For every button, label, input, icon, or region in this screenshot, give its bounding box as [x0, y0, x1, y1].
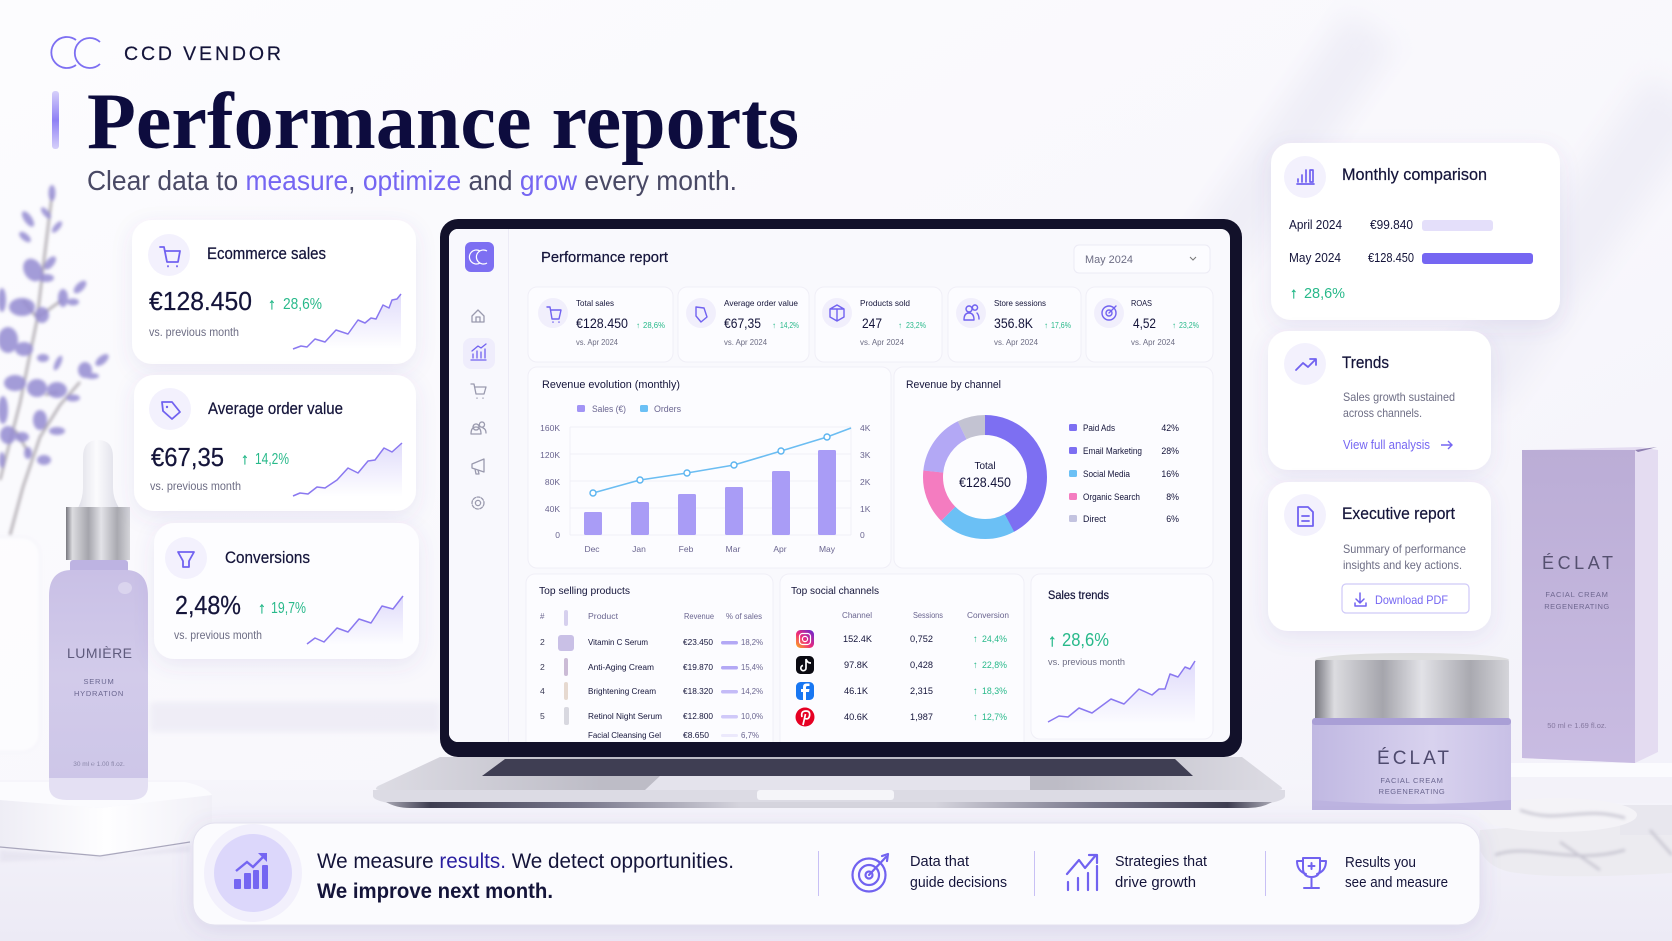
panel: top selling products: Top selling products: [539, 585, 630, 597]
panel: average order value: [134, 375, 416, 511]
box label: [1542, 553, 1613, 730]
table rows: [540, 635, 763, 740]
lavender sprig: [0, 185, 111, 535]
bars: [584, 450, 836, 535]
kpi: roas: 23,2%: [1179, 321, 1199, 330]
sparkline: [1048, 661, 1195, 724]
axes: 2K: [860, 477, 871, 487]
axes: Apr: [773, 544, 787, 554]
panel: revenue by channel: Total: [974, 461, 996, 472]
axes: May: [819, 544, 836, 554]
panel: trends: [1268, 331, 1491, 470]
table rows: 6,7%: [741, 730, 759, 740]
table rows: €19.870: [683, 662, 713, 672]
sparkline: [293, 294, 401, 349]
serum label: SERUM: [83, 677, 115, 686]
legend: Sales (€): [592, 404, 626, 414]
table rows: €18.320: [683, 686, 713, 696]
panel: conversions: [154, 523, 419, 659]
panel: monthly comparison: €128.450: [1368, 251, 1414, 265]
panel: ecommerce sales: 28,6%: [283, 296, 322, 313]
donut legend: Organic Search: [1083, 492, 1140, 502]
table rows: 2: [540, 637, 545, 647]
icon: gear: [472, 497, 484, 509]
panel: revenue evolution chart: Revenue evolution (monthly): [542, 379, 680, 391]
panel: average order value: €67,35: [151, 442, 224, 472]
table rows: 1,987: [910, 712, 933, 723]
kpi: store sessions: 17,6%: [1051, 321, 1071, 330]
panel: conversions: Conversions: [225, 549, 310, 567]
panel: top social channels: Top social channels: [791, 585, 879, 597]
table rows: 18,3%: [982, 686, 1008, 697]
axes: 3K: [860, 450, 871, 460]
panel: executive report: insights and key actions.: [1343, 558, 1462, 572]
axes: 40K: [545, 504, 560, 514]
icon: megaphone: [472, 459, 484, 474]
panel: revenue by channel: €128.450: [959, 474, 1011, 490]
table rows: €8.650: [683, 730, 709, 740]
kpi: average order value: €67,35: [724, 315, 761, 331]
table rows: 4: [540, 686, 545, 696]
kpi: total sales: [528, 287, 673, 362]
icon: cart: [471, 384, 486, 398]
table rows: Facial Cleansing Gel: [588, 730, 661, 740]
panel: trends: across channels.: [1343, 406, 1422, 420]
axes: 0: [860, 530, 865, 540]
text: data that guide decisions: [910, 854, 1007, 891]
table rows: 0,752: [910, 634, 933, 645]
panel: conversions: 2,48%: [175, 590, 241, 620]
sidebar: [449, 229, 509, 742]
panel: top selling products: [526, 574, 774, 742]
icon: growth badge: [204, 824, 302, 922]
text: data that guide decisions: guide decisions: [910, 875, 1007, 891]
kpi: roas: vs. Apr 2024: [1131, 338, 1176, 347]
serum bottle: [49, 440, 148, 800]
panel: monthly comparison: Monthly comparison: [1342, 166, 1487, 184]
icon: document: [1298, 507, 1313, 526]
panel: revenue by channel: Revenue by channel: [906, 379, 1001, 391]
panel: revenue evolution chart: [528, 367, 891, 568]
table rows: 46.1K: [844, 686, 869, 697]
panel: ecommerce sales: vs. previous month: [149, 325, 239, 339]
table header: Conversion: [967, 611, 1009, 620]
panel: bottom banner: [193, 823, 1480, 925]
kpi: average order value: vs. Apr 2024: [724, 338, 768, 347]
axes: 1K: [860, 504, 871, 514]
icon: trophy: [1297, 858, 1326, 888]
table header: Product: [588, 612, 619, 621]
legend: Orders: [654, 404, 681, 414]
box label: FACIAL CREAM: [1545, 590, 1609, 599]
sparkline: [307, 596, 403, 645]
legend: [577, 405, 681, 414]
jar label: ÉCLAT: [1377, 748, 1449, 769]
panel: average order value: ↑: [241, 451, 249, 468]
text: data that guide decisions: Data that: [910, 854, 969, 870]
table rows: €23.450: [683, 637, 713, 647]
box label: 50 ml ℮ 1.69 fl.oz.: [1547, 721, 1607, 730]
table rows: 10,0%: [741, 711, 763, 721]
box label: REGENERATING: [1544, 602, 1610, 611]
kpi: roas: [1086, 287, 1213, 362]
donut legend: 6%: [1166, 514, 1179, 524]
table header: #: [540, 612, 545, 621]
kpi: total sales: vs. Apr 2024: [576, 338, 619, 347]
donut legend: Direct: [1083, 514, 1107, 524]
table rows: 24,4%: [982, 634, 1008, 645]
panel: sales trends: ↑: [1048, 631, 1056, 650]
kpi: total sales: Total sales: [576, 298, 614, 308]
icon: facebook: [796, 682, 814, 700]
kpi: store sessions: 356.8K: [994, 315, 1034, 331]
table rows: 2: [540, 662, 545, 672]
donut legend: Social Media: [1083, 469, 1130, 479]
panel: ecommerce sales: Ecommerce sales: [207, 245, 326, 263]
table header: [842, 612, 1008, 618]
serum label: [67, 645, 132, 768]
kpi: store sessions: ↑: [1044, 321, 1048, 330]
kpi: products sold: Products sold: [860, 298, 910, 308]
kpi: average order value: [678, 287, 809, 362]
donut legend: Email Marketing: [1083, 446, 1142, 456]
donut legend: 16%: [1161, 469, 1179, 479]
panel: conversions: ↑: [258, 600, 266, 617]
text: strategies that drive growth: Strategies that: [1115, 854, 1207, 870]
table rows: 22,8%: [982, 660, 1008, 671]
white pedestal under serum: [0, 782, 212, 862]
product box: [1522, 447, 1658, 763]
panel: monthly comparison: April 2024: [1289, 218, 1342, 232]
axes: 80K: [545, 477, 560, 487]
glass vase: [0, 537, 40, 752]
laptop bezel: [440, 219, 1242, 757]
logo: [51, 37, 281, 68]
laptop: [373, 219, 1285, 808]
table rows: Vitamin C Serum: [588, 637, 648, 647]
donut legend: [1069, 423, 1179, 524]
kpi: average order value: ↑: [772, 321, 776, 330]
kpi: products sold: 247: [862, 315, 882, 331]
panel: sales trends: 28,6%: [1062, 630, 1109, 650]
table rows: ↑: [973, 660, 978, 671]
table rows: 18,2%: [741, 637, 763, 647]
button: download pdf: [1342, 584, 1469, 613]
table rows: Anti-Aging Cream: [588, 662, 654, 672]
table header: [540, 610, 762, 626]
panel: trends: Sales growth sustained: [1343, 390, 1455, 404]
table rows: 5: [540, 711, 545, 721]
kpi: average order value: Average order value: [724, 298, 798, 308]
axes: Mar: [726, 544, 740, 554]
panel: average order value: vs. previous month: [150, 479, 241, 493]
icon: strategies chart: [1067, 855, 1097, 890]
kpi: products sold: ↑: [898, 321, 902, 330]
text: strategies that drive growth: [1115, 854, 1207, 891]
kpi: products sold: 23,2%: [906, 321, 926, 330]
axes: 120K: [540, 450, 560, 460]
donut legend: Paid Ads: [1083, 423, 1116, 433]
text: results you see and measure: see and measure: [1345, 875, 1448, 891]
kpi: total sales: ↑: [636, 321, 640, 330]
icon: users: [471, 422, 486, 434]
banner message: We measure results. We detect opportunities.: [317, 850, 734, 873]
donut chart: [923, 415, 1047, 539]
kpi: total sales: €128.450: [576, 315, 628, 331]
subtitle: Clear data to measure, optimize and grow every month.: [87, 165, 737, 196]
kpi: roas: ↑: [1172, 321, 1176, 330]
banner message: We improve next month.: [317, 880, 553, 903]
icon: funnel: [178, 552, 194, 567]
month selector: [1074, 245, 1210, 273]
table rows: ↑: [973, 686, 978, 697]
panel: revenue by channel: [894, 367, 1213, 568]
panel: average order value: 14,2%: [255, 451, 289, 468]
screen: [449, 229, 1230, 764]
donut legend: 28%: [1161, 446, 1179, 456]
panel: sales trends: Sales trends: [1048, 588, 1109, 602]
axes: 0: [555, 530, 560, 540]
kpi: total sales: 28,6%: [643, 321, 665, 330]
panel: conversions: vs. previous month: [174, 628, 262, 642]
sparkline: [293, 443, 402, 497]
kpi: products sold: vs. Apr 2024: [860, 338, 905, 347]
banner message: [317, 850, 734, 903]
kpi: roas: ROAS: [1131, 298, 1152, 308]
jar label: [1377, 748, 1449, 796]
table rows: 14,2%: [741, 686, 763, 696]
donut legend: 8%: [1166, 492, 1179, 502]
panel: sales trends: vs. previous month: [1048, 657, 1125, 668]
white pedestal and marble dish: [1478, 763, 1672, 876]
panel: executive report: Executive report: [1342, 505, 1455, 523]
panel: trends: Trends: [1342, 354, 1389, 372]
table rows: ↑: [973, 634, 978, 645]
panel: ecommerce sales: [132, 220, 416, 364]
icon: instagram: [796, 630, 814, 648]
icon: tag: [162, 402, 180, 419]
jar label: REGENERATING: [1379, 787, 1445, 796]
panel: sales trends: [1031, 574, 1213, 739]
donut legend: 42%: [1161, 423, 1179, 433]
arrow: [1441, 441, 1452, 449]
icon: cart: [160, 247, 180, 266]
kpi: products sold: [815, 287, 942, 362]
table rows: Brightening Cream: [588, 686, 656, 696]
panel: trends: View full analysis: [1343, 438, 1430, 452]
panel: executive report: [1268, 482, 1491, 631]
table rows: 40.6K: [844, 712, 869, 723]
axes: 160K: [540, 423, 560, 433]
table rows: Retinol Night Serum: [588, 711, 662, 721]
kpi: store sessions: [948, 287, 1081, 362]
table rows: 15,4%: [741, 662, 763, 672]
table header: Channel: [842, 611, 872, 620]
kpi: average order value: 14,2%: [780, 321, 799, 330]
text: strategies that drive growth: drive growth: [1115, 875, 1196, 891]
panel: monthly comparison: ↑: [1290, 285, 1298, 302]
table header: Revenue: [684, 612, 715, 621]
serum label: HYDRATION: [74, 689, 124, 698]
table rows: 12,7%: [982, 712, 1008, 723]
icon: home: [472, 310, 484, 322]
title: Performance reports: [87, 76, 799, 166]
table header: % of sales: [726, 612, 762, 621]
panel: monthly comparison: €99.840: [1370, 218, 1413, 232]
table rows: 97.8K: [844, 660, 869, 671]
axes: [540, 423, 871, 554]
axes: Dec: [584, 544, 600, 554]
kpi: store sessions: Store sessions: [994, 298, 1046, 308]
panel: ecommerce sales: €128.450: [149, 286, 252, 316]
table rows: 0,428: [910, 660, 933, 671]
icon: chart: [471, 344, 486, 360]
panel: ecommerce sales: ↑: [268, 296, 276, 313]
button: download pdf: Download PDF: [1375, 593, 1448, 607]
table rows: 152.4K: [843, 634, 873, 645]
icon: pinterest: [796, 708, 814, 726]
axes: Feb: [679, 544, 694, 554]
panel: monthly comparison: [1271, 143, 1560, 320]
table header: Sessions: [913, 611, 943, 620]
table rows: [843, 634, 1008, 723]
icon: tiktok: [796, 656, 814, 674]
panel: average order value: Average order value: [208, 400, 343, 418]
jar label: FACIAL CREAM: [1380, 776, 1444, 785]
dashboard heading: Performance report: [541, 250, 668, 266]
icon: trend arrow: [1296, 359, 1316, 370]
text: results you see and measure: [1345, 855, 1448, 891]
logo: CCD VENDOR: [124, 43, 281, 65]
box label: ÉCLAT: [1542, 553, 1613, 573]
serum label: 30 ml ℮ 1.00 fl.oz.: [73, 761, 125, 768]
serum label: LUMIÈRE: [67, 645, 132, 661]
text: results you see and measure: Results you: [1345, 855, 1416, 871]
kpi: roas: 4,52: [1133, 315, 1156, 331]
axes: Jan: [632, 544, 646, 554]
panel: monthly comparison: 28,6%: [1304, 285, 1345, 302]
cream jar: [1312, 653, 1511, 810]
panel: top social channels: [780, 574, 1024, 742]
panel: conversions: 19,7%: [271, 600, 306, 617]
axes: 4K: [860, 423, 871, 433]
icon: bar chart: [1297, 170, 1314, 184]
table rows: 2,315: [910, 686, 933, 697]
laptop base: [373, 757, 1285, 808]
table rows: ↑: [973, 712, 978, 723]
panel: executive report: Summary of performance: [1343, 542, 1466, 556]
month selector: May 2024: [1085, 254, 1133, 266]
table rows: €12.800: [683, 711, 713, 721]
orders line: [590, 428, 851, 496]
panel: monthly comparison: May 2024: [1289, 251, 1341, 265]
icon: target: [852, 854, 888, 892]
kpi: store sessions: vs. Apr 2024: [994, 338, 1039, 347]
